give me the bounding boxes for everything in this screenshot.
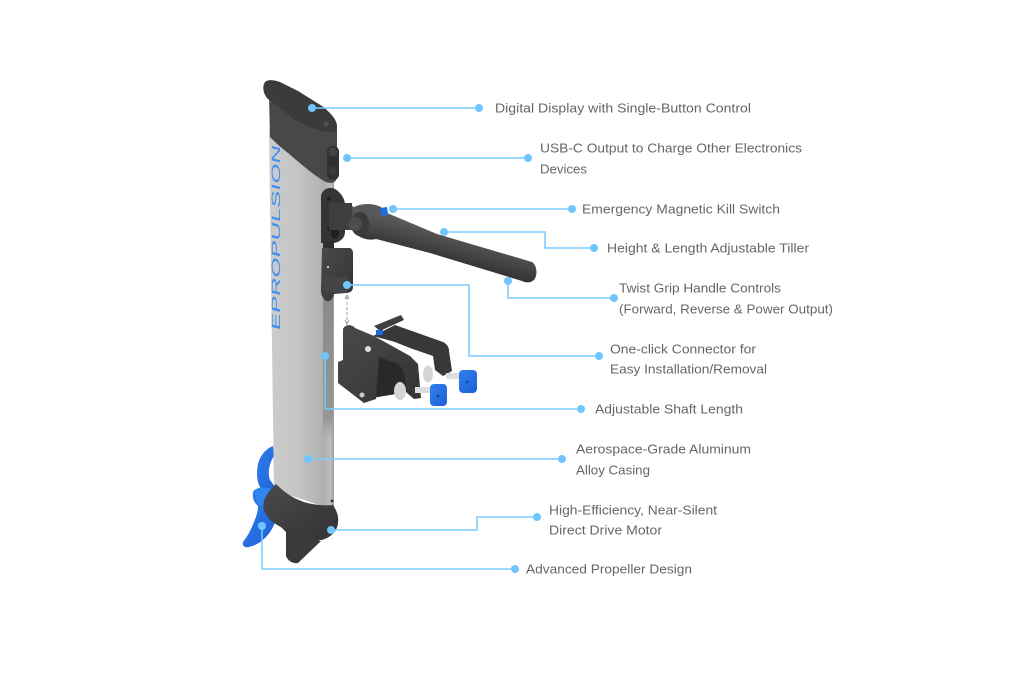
callout: shaft length: Adjustable Shaft Length [595,402,743,416]
callout: one-click connector: Easy Installation/Removal [610,362,767,376]
wordmark: EPROPULSION [269,143,283,332]
callout: twist grip: (Forward, Reverse & Power Output) [619,302,833,316]
tiller arm [329,203,536,282]
product: electric outboard motor [243,80,536,563]
callout: tiller: Height & Length Adjustable Tiller [607,240,810,256]
clamp [338,315,452,403]
propeller [243,446,276,547]
clamp screws [394,366,461,400]
callout: motor [327,502,717,538]
callout: propeller: Advanced Propeller Design [526,562,692,576]
kill switch [380,207,388,216]
callout: digital display: Digital Display with Single-Button Control [495,100,751,116]
callout: USB-C output [343,140,803,176]
callout: twist grip [504,277,833,316]
callout: kill switch [389,202,780,216]
callout: one-click connector: One-click Connector for [610,342,757,356]
attachment arrow [345,295,349,324]
callout: aluminum casing: Alloy Casing [576,462,650,478]
callout: USB-C output: Devices [540,162,587,176]
callout: motor: Direct Drive Motor [549,522,663,538]
callout: twist grip: Twist Grip Handle Controls [619,280,782,296]
control head with display [263,80,339,183]
callout: digital display [308,100,751,116]
callout: aluminum casing [304,442,751,478]
callout: propeller [258,522,692,576]
callout: USB-C output: USB-C Output to Charge Other Electronics [540,140,803,156]
aluminum casing [269,130,334,510]
callout: aluminum casing: Aerospace-Grade Aluminum [576,442,751,456]
connector block [321,241,353,301]
callout: tiller [440,228,810,256]
callout: one-click connector [343,281,767,376]
callout: shaft length [321,352,743,416]
callout: motor: High-Efficiency, Near-Silent [549,502,717,518]
callout: kill switch: Emergency Magnetic Kill Switch [582,202,780,216]
clamp knobs [430,370,477,406]
adjustable shaft [323,298,333,448]
tiller mount [321,188,345,243]
motor housing and fin [263,484,338,563]
